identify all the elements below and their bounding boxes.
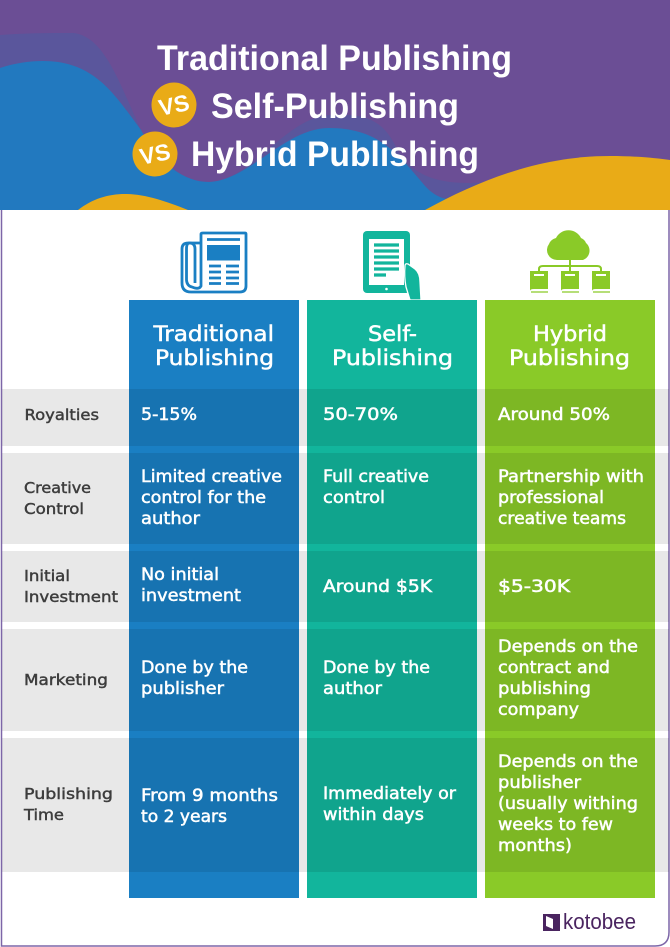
hybrid publishing values: (usually withing bbox=[498, 794, 638, 813]
row labels: Royalties bbox=[24, 406, 99, 424]
hybrid publishing values: Depends on the bbox=[498, 637, 638, 656]
column: hybrid publishing background bbox=[485, 300, 655, 898]
row labels: Publishing bbox=[24, 785, 113, 803]
icon: tablet with hand bbox=[363, 231, 421, 300]
vs badge two: VS bbox=[137, 138, 173, 170]
title: Self-Publishing bbox=[211, 87, 459, 126]
logo: kotobee: kotobee bbox=[563, 909, 636, 934]
self-publishing values bbox=[323, 405, 456, 824]
self-publishing values: Around $5K bbox=[323, 577, 433, 596]
traditional publishing values: author bbox=[141, 509, 200, 528]
title: Hybrid Publishing bbox=[191, 135, 479, 174]
hybrid publishing values: creative teams bbox=[498, 509, 626, 528]
column: traditional publishing background bbox=[129, 300, 299, 898]
column heading: hybrid publishing bbox=[509, 322, 630, 370]
hybrid publishing values: company bbox=[498, 700, 579, 719]
hybrid publishing values: publisher bbox=[498, 773, 581, 792]
row labels: Investment bbox=[24, 588, 118, 606]
column: self-publishing background bbox=[307, 300, 477, 898]
column heading: hybrid publishing: Hybrid bbox=[533, 322, 607, 346]
hybrid publishing values: publishing bbox=[498, 679, 591, 698]
column heading: traditional publishing: Publishing bbox=[155, 346, 274, 370]
traditional publishing values: to 2 years bbox=[141, 807, 227, 826]
hybrid publishing values: months) bbox=[498, 836, 572, 855]
hybrid publishing values: Around 50% bbox=[498, 405, 610, 424]
traditional publishing values: From 9 months bbox=[141, 786, 278, 805]
traditional publishing values: investment bbox=[141, 586, 242, 605]
hybrid publishing values bbox=[498, 405, 644, 855]
icon: cloud network bbox=[530, 230, 610, 292]
traditional publishing values: Limited creative bbox=[141, 467, 282, 486]
column heading: traditional publishing: Traditional bbox=[152, 322, 274, 346]
hybrid publishing values: weeks to few bbox=[498, 815, 613, 834]
self-publishing values: Done by the bbox=[323, 658, 430, 677]
hybrid publishing values: $5-30K bbox=[498, 577, 571, 596]
row labels bbox=[23, 406, 118, 824]
vs badge two bbox=[132, 132, 178, 176]
column heading: self-publishing: Self- bbox=[368, 322, 417, 346]
vs badge one bbox=[152, 82, 196, 128]
header banner bbox=[0, 0, 670, 210]
vs badge one: VS bbox=[156, 89, 192, 121]
row labels: Control bbox=[24, 500, 84, 518]
self-publishing values: within days bbox=[323, 805, 424, 824]
row labels: Initial bbox=[24, 567, 70, 585]
row labels: Marketing bbox=[24, 671, 108, 689]
self-publishing values: control bbox=[323, 488, 385, 507]
row bands bbox=[2, 389, 669, 872]
column heading: self-publishing: Publishing bbox=[332, 346, 453, 370]
traditional publishing values: 5-15% bbox=[141, 405, 197, 424]
title bbox=[132, 39, 512, 176]
hybrid publishing values: professional bbox=[498, 488, 604, 507]
self-publishing values: author bbox=[323, 679, 382, 698]
hybrid publishing values: Depends on the bbox=[498, 752, 638, 771]
row labels: Time bbox=[23, 806, 64, 824]
self-publishing values: Full creative bbox=[323, 467, 429, 486]
column heading: self-publishing bbox=[332, 322, 453, 370]
page frame bbox=[2, 205, 669, 946]
icon: newspaper bbox=[182, 233, 246, 292]
row labels: Creative bbox=[24, 479, 91, 497]
hybrid publishing values: Partnership with bbox=[498, 467, 644, 486]
traditional publishing values bbox=[141, 405, 282, 826]
hybrid publishing values: contract and bbox=[498, 658, 610, 677]
traditional publishing values: control for the bbox=[141, 488, 266, 507]
column heading: traditional publishing bbox=[152, 322, 274, 370]
traditional publishing values: Done by the bbox=[141, 658, 248, 677]
title: Traditional Publishing bbox=[157, 39, 512, 78]
traditional publishing values: No initial bbox=[141, 565, 219, 584]
traditional publishing values: publisher bbox=[141, 679, 224, 698]
self-publishing values: 50-70% bbox=[323, 405, 398, 424]
self-publishing values: Immediately or bbox=[323, 784, 456, 803]
column heading: hybrid publishing: Publishing bbox=[509, 346, 630, 370]
